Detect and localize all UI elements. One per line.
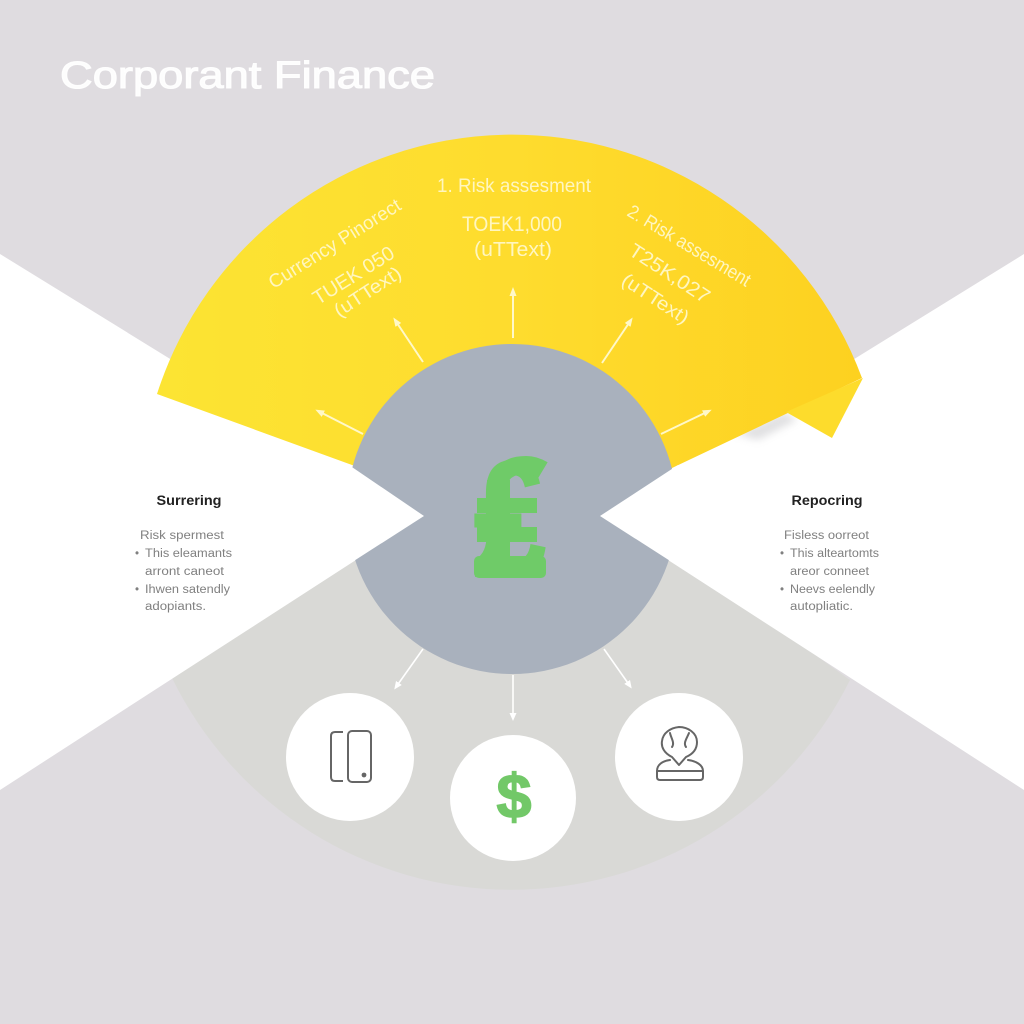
shadow under yellow fold: [735, 412, 797, 440]
text block: Surrering: •: [135, 584, 139, 596]
text block: Repocring: [780, 493, 879, 613]
text block: Surrering: adopiants.: [145, 601, 206, 613]
text block: centre yellow segment: 1. Risk assesment: [437, 176, 592, 197]
text block: Surrering: •: [135, 548, 139, 560]
text block: Repocring: •: [780, 584, 784, 596]
title: Corporant Finance: [60, 55, 435, 97]
text block: Repocring: areor conneet: [790, 566, 870, 578]
text block: left yellow segment: TUEK 050: [309, 242, 399, 310]
text block: right yellow segment: [617, 201, 755, 329]
text block: Surrering: [135, 493, 232, 613]
text block: Repocring: Neevs eelendly: [790, 584, 875, 596]
icon: dollar circle: [450, 735, 576, 861]
central grey circle: [347, 344, 677, 674]
icon: person circle: [615, 693, 743, 821]
panel: lower grey fan: [172, 500, 850, 890]
arrows: upward to yellow segments: [318, 290, 709, 434]
icon: dollar circle: $: [496, 763, 532, 832]
text block: Surrering: Surrering: [156, 493, 222, 508]
text block: Repocring: autopliatic.: [790, 601, 853, 613]
text block: right yellow segment: T25K,027: [625, 240, 714, 308]
text block: centre yellow segment: [437, 176, 592, 261]
text block: Repocring: Repocring: [792, 493, 862, 508]
text block: Surrering: This eleamants: [145, 548, 232, 560]
icon: central pound sign: £: [473, 425, 547, 613]
folded corner of the yellow fan: [786, 378, 863, 438]
panel: yellow fan: [157, 135, 863, 510]
panel: left white wedge: [0, 254, 424, 790]
icon: phone circle: [286, 693, 414, 821]
text block: left yellow segment: Currency Pinorect: [265, 195, 406, 294]
text block: centre yellow segment: TOEK1,000: [462, 213, 562, 236]
text block: Surrering: arront caneot: [145, 566, 225, 578]
text block: Surrering: Risk spermest: [140, 530, 225, 542]
arrows: downward to icons: [396, 649, 630, 718]
text block: left yellow segment: (uTText): [330, 263, 406, 322]
text block: Surrering: Ihwen satendly: [145, 584, 230, 596]
panel: right white wedge: [600, 254, 1024, 790]
text block: centre yellow segment: (uTText): [474, 239, 552, 261]
right wedge tip: [600, 465, 678, 566]
text block: Repocring: This alteartomts: [790, 548, 879, 560]
text block: right yellow segment: (uTText): [617, 270, 693, 329]
left wedge tip: [346, 463, 424, 566]
text block: right yellow segment: 2. Risk assesment: [623, 201, 755, 292]
text block: Repocring: Fisless oorreot: [784, 530, 870, 542]
text block: Repocring: •: [780, 548, 784, 560]
